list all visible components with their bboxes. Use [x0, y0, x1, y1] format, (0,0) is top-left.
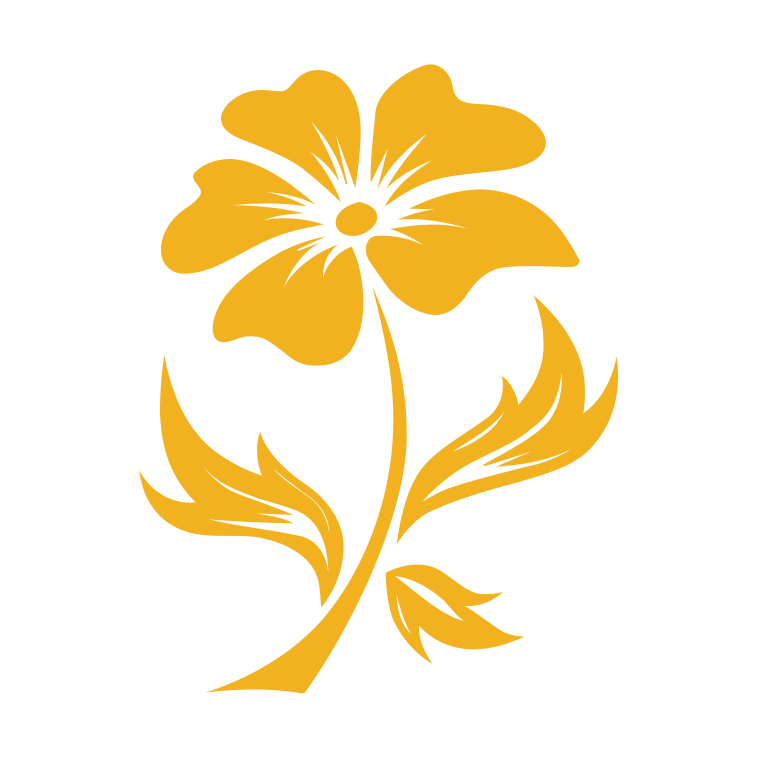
right leaves	[386, 296, 618, 664]
petal: left	[161, 159, 323, 274]
stem	[205, 287, 407, 693]
petal: top left	[221, 70, 361, 202]
petal: bottom	[213, 236, 363, 366]
stem and left leaf	[139, 287, 407, 693]
small bottom leaf	[386, 565, 524, 664]
right leaf	[397, 296, 618, 544]
petal: right	[366, 189, 579, 315]
flower head	[161, 64, 579, 366]
left leaf	[139, 355, 344, 608]
flower centre	[336, 202, 377, 236]
petal: top right	[371, 64, 546, 207]
